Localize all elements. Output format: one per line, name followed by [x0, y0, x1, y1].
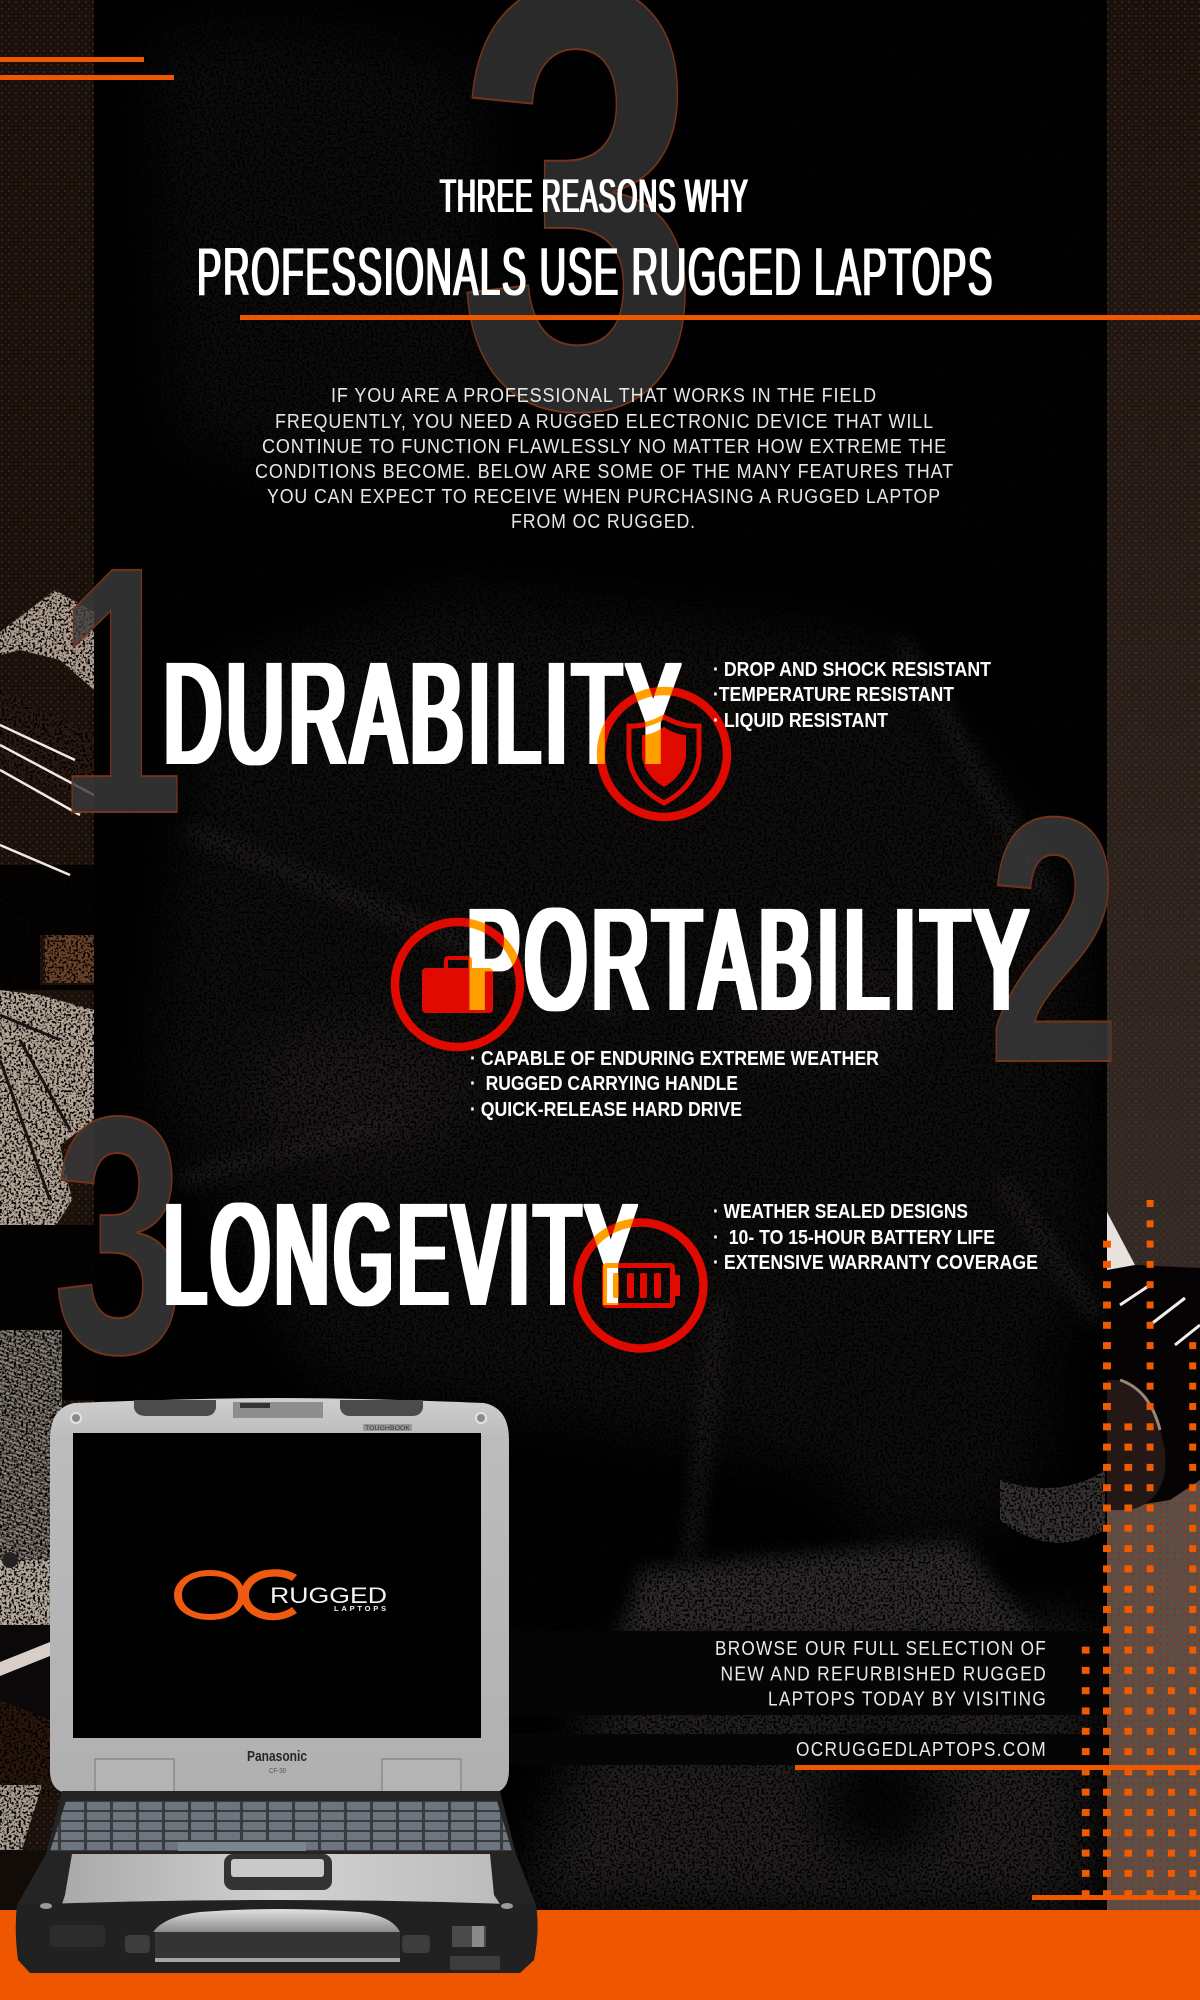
- palm rest: [62, 1854, 500, 1904]
- title: [197, 169, 994, 310]
- URL underline: [795, 1765, 1200, 1770]
- call to action text: NEW AND REFURBISHED RUGGED: [720, 1664, 1047, 1686]
- portability bullet list: · QUICK-RELEASE HARD DRIVE: [470, 1099, 742, 1121]
- lid top notches: [134, 1400, 423, 1418]
- intro text block: FREQUENTLY, YOU NEED A RUGGED ELECTRONIC DEVICE THAT WILL: [275, 411, 934, 433]
- base front: [16, 1900, 538, 1973]
- carrying handle: [153, 1909, 400, 1962]
- brand text: [247, 1748, 307, 1775]
- intro text block: CONDITIONS BECOME. BELOW ARE SOME OF THE MANY FEATURES THAT: [255, 461, 954, 483]
- icon: briefcase: [395, 922, 520, 1047]
- call to action text: BROWSE OUR FULL SELECTION OF: [715, 1638, 1047, 1660]
- footer band: [0, 1910, 1200, 2000]
- laptop lid: [50, 1398, 509, 1793]
- icon highlight: battery over text: [578, 1222, 704, 1348]
- intro text block: CONTINUE TO FUNCTION FLAWLESSLY NO MATTER HOW EXTREME THE: [262, 436, 947, 458]
- laptop screen: [73, 1433, 481, 1738]
- title: THREE REASONS WHY: [440, 169, 749, 222]
- heading: longevity: LONGEVITY: [164, 1174, 641, 1335]
- title underline: [240, 315, 1200, 320]
- keyboard keys: [46, 1801, 516, 1851]
- call to action text: LAPTOPS TODAY BY VISITING: [768, 1688, 1047, 1710]
- longevity bullet list: · WEATHER SEALED DESIGNS: [713, 1201, 968, 1223]
- longevity bullet list: [713, 1201, 1038, 1274]
- durability bullet list: · LIQUID RESISTANT: [713, 710, 888, 732]
- intro text block: YOU CAN EXPECT TO RECEIVE WHEN PURCHASING A RUGGED LAPTOP: [267, 486, 941, 508]
- bottom-right accent line: [1032, 1895, 1200, 1900]
- logo: OC Rugged Laptops: [174, 1569, 387, 1620]
- brand text: Panasonic: [247, 1748, 307, 1765]
- number 1: 1: [58, 493, 183, 887]
- latch: [452, 1926, 486, 1947]
- number 3: 3: [53, 1046, 185, 1424]
- icon highlight: shield over text: [601, 691, 727, 817]
- logo: OC Rugged Laptops: RUGGED: [270, 1583, 387, 1608]
- brand text: CF-30: [269, 1768, 286, 1775]
- number 2: 2: [988, 745, 1120, 1136]
- call to action text: OCRUGGEDLAPTOPS.COM: [796, 1739, 1047, 1761]
- screws: [71, 1413, 486, 1423]
- durability bullet list: ·TEMPERATURE RESISTANT: [713, 684, 954, 706]
- icon highlight: briefcase over text: [395, 922, 520, 1047]
- keyboard deck: [17, 1791, 536, 1905]
- durability bullet list: [713, 659, 991, 732]
- touchpad: [224, 1854, 332, 1890]
- portability bullet list: · RUGGED CARRYING HANDLE: [470, 1073, 738, 1095]
- call to action text: [715, 1638, 1047, 1761]
- base hardware: [50, 1925, 500, 1970]
- background panel: right strip: [1107, 0, 1200, 1910]
- laptop illustration: [16, 1398, 538, 1973]
- logo: OC Rugged Laptops: LAPTOPS: [334, 1604, 386, 1613]
- intro text block: FROM OC RUGGED.: [511, 511, 696, 533]
- longevity bullet list: · 10- TO 15-HOUR BATTERY LIFE: [713, 1227, 995, 1249]
- icon: battery: [578, 1222, 704, 1348]
- portability bullet list: [470, 1048, 879, 1121]
- intro text block: [255, 385, 954, 533]
- top-left accent lines: [0, 57, 174, 80]
- hinges: [95, 1759, 461, 1793]
- toughbook badge: TOUGHBOOK: [365, 1425, 411, 1432]
- durability bullet list: · DROP AND SHOCK RESISTANT: [713, 659, 991, 681]
- background panel: left strip: [0, 0, 94, 1910]
- icon: shield: [601, 691, 727, 817]
- call-to-action bands: [480, 1631, 1109, 1765]
- heading: durability: DURABILITY: [164, 633, 685, 794]
- portability bullet list: · CAPABLE OF ENDURING EXTREME WEATHER: [470, 1048, 879, 1070]
- intro text block: IF YOU ARE A PROFESSIONAL THAT WORKS IN THE FIELD: [331, 385, 877, 407]
- longevity bullet list: · EXTENSIVE WARRANTY COVERAGE: [713, 1252, 1038, 1274]
- base screws: [40, 1903, 513, 1909]
- orange dot grid: [1082, 1200, 1197, 1897]
